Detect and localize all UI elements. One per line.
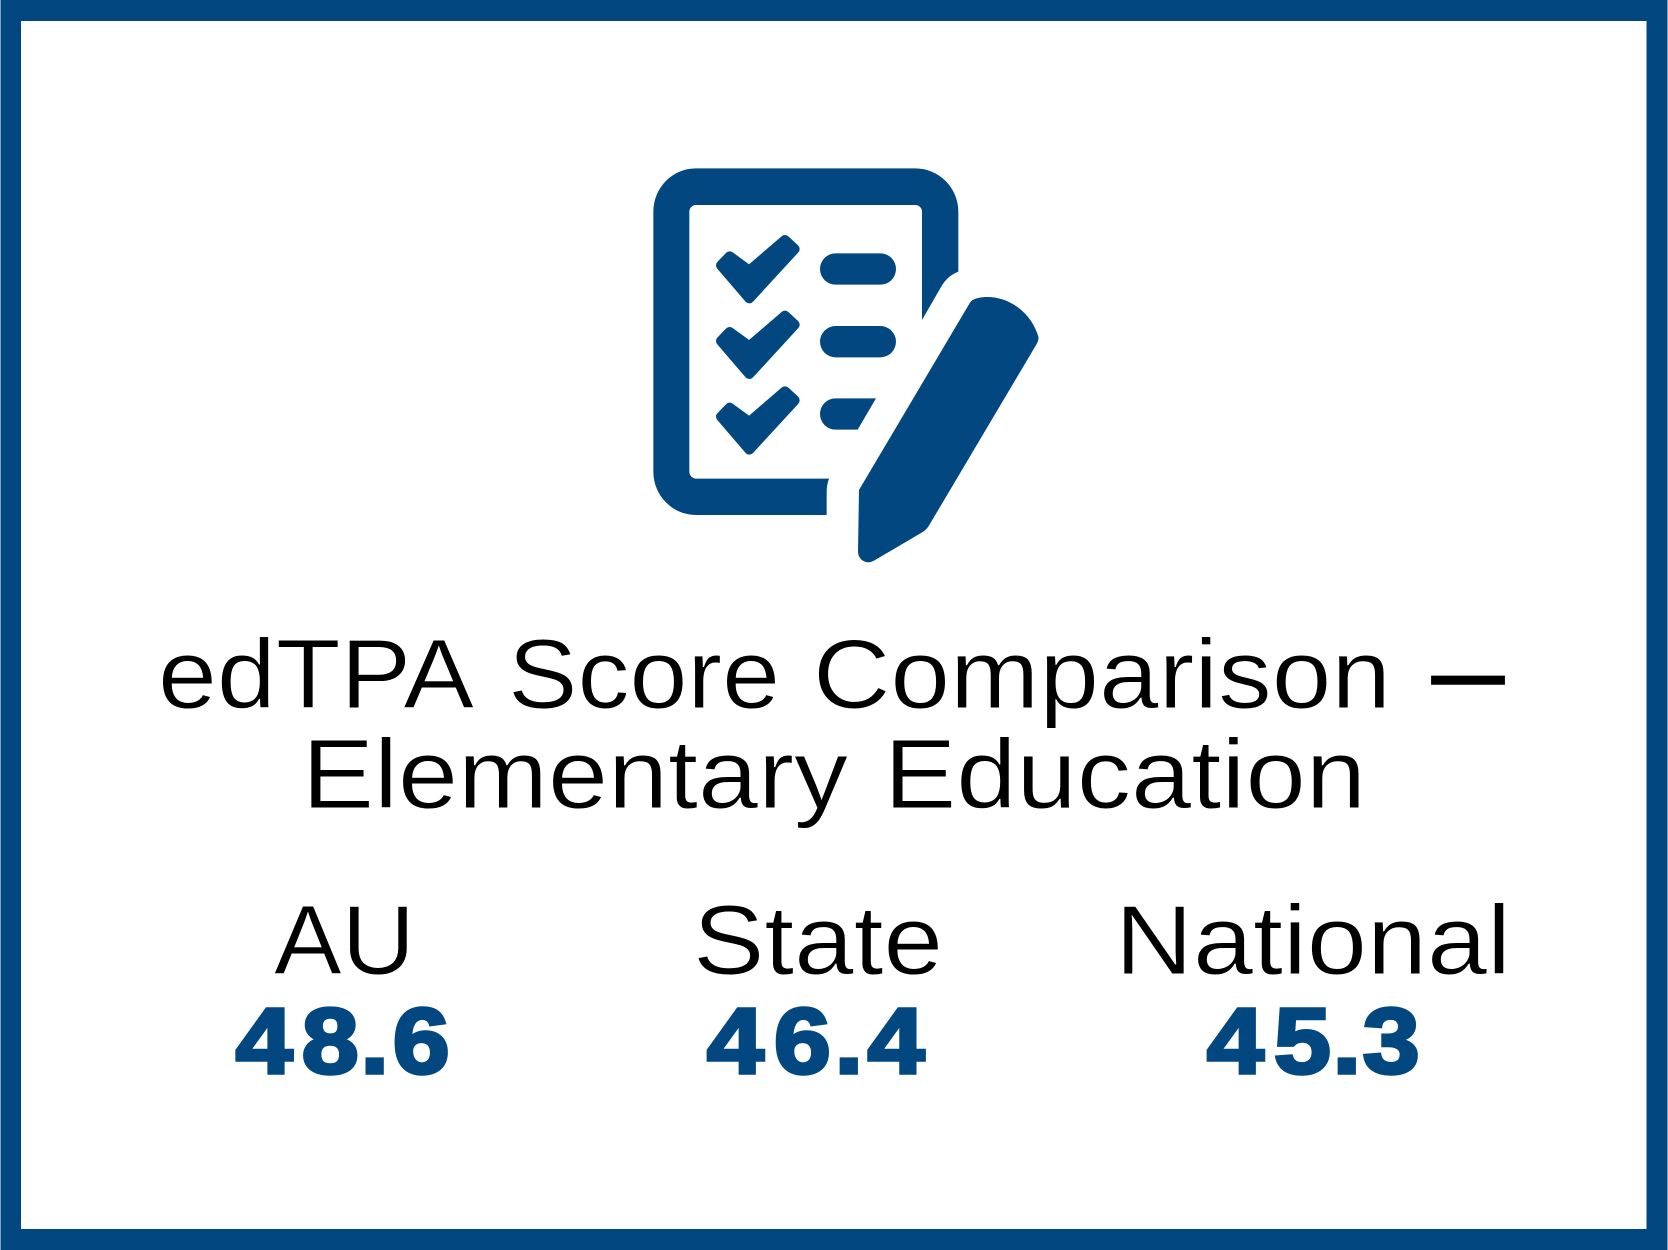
title: — [1432, 616, 1504, 726]
title: Score [508, 619, 780, 729]
stat: National: National [1115, 885, 1511, 995]
icon part: pencil [858, 297, 1038, 562]
stat: AU: AU [274, 885, 415, 995]
stat: AU [236, 885, 450, 1093]
icon part: check marks [721, 240, 795, 450]
title [158, 616, 1504, 829]
icon part: document outline [653, 168, 958, 515]
stat: State: 46.4 [707, 989, 924, 1093]
stat: National: 45.3 [1207, 989, 1420, 1093]
stat: National [1115, 885, 1511, 1093]
title: Elementary [302, 719, 848, 829]
stat: AU: 48.6 [236, 989, 450, 1093]
icon part: list lines [820, 253, 896, 430]
stat: State: State [693, 885, 943, 995]
title: Education [884, 719, 1366, 829]
title: edTPA [158, 619, 475, 729]
title: Comparison [813, 619, 1391, 729]
icon: checklist with pencil [653, 168, 1038, 562]
stat: State [693, 885, 943, 1093]
